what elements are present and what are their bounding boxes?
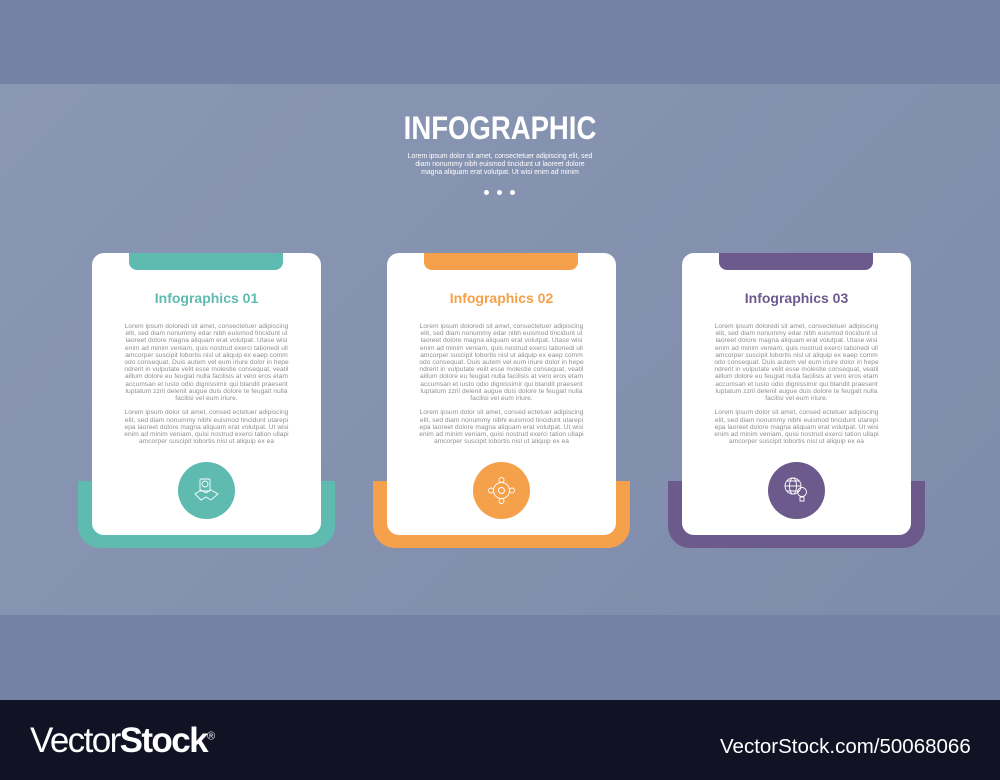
body text: accumsan et iusto odio dignissimir qui blandit praesent bbox=[420, 381, 583, 388]
body text: amcorper suscipit lobortis nisl ut aliquip ex eaep comm bbox=[125, 352, 288, 359]
icon: cycle bbox=[473, 462, 530, 519]
body text: elit, sed diam nonummy nibhi euismod tincidunt utarepi bbox=[420, 417, 583, 424]
body text: aillum dolore eu feugiat nulla facilisis at vero eros etam bbox=[125, 373, 288, 380]
body text: facilisi vel eum iriure. bbox=[765, 395, 828, 402]
body text: epa laoreet dolore magna aliquam erat volutpat. Ut wisi bbox=[714, 424, 879, 431]
body text: Lorem ipsum dolor sit amet, consed ectetuer adipiscing bbox=[715, 409, 878, 416]
tab bbox=[129, 253, 283, 270]
body text: ndrerit in vulputate velit esse molestie consequat, veatil bbox=[124, 366, 289, 373]
body text: accumsan et iusto odio dignissimir qui blandit praesent bbox=[715, 381, 878, 388]
footer bar bbox=[0, 700, 1000, 780]
body text: amcorper suscipit lobortis nisl ut aliquip ex eaep comm bbox=[420, 352, 583, 359]
body text: laoreet dolore magna aliquam erat volutpat. Utase wisi bbox=[126, 337, 287, 344]
title: INFOGRAPHIC bbox=[404, 110, 596, 146]
body text: Lorem ipsum doloredi sit amet, consectetuer adipiscing bbox=[125, 323, 288, 330]
body text: laoreet dolore magna aliquam erat volutpat. Utase wisi bbox=[421, 337, 582, 344]
body text bbox=[419, 323, 584, 445]
body text: ndrerit in vulputate velit esse molestie consequat, veatil bbox=[714, 366, 879, 373]
body text: enim ad minim veniam, quis nostrud exerci tationedi ull bbox=[715, 345, 878, 352]
body text: luptatum zzril delenit augue duis dolore te feugait nulla bbox=[421, 388, 582, 395]
body text: epa laoreet dolore magna aliquam erat volutpat. Ut wisi bbox=[124, 424, 289, 431]
body text: luptatum zzril delenit augue duis dolore te feugait nulla bbox=[126, 388, 287, 395]
subtitle text: magna aliquam erat volutpat. Ut wisi enim ad minim bbox=[421, 169, 579, 176]
panel: card 2 bbox=[387, 253, 616, 535]
body text: Lorem ipsum dolor sit amet, consed ectetuer adipiscing bbox=[420, 409, 583, 416]
body text: enim ad minim veniam, quisi nostrud exerci tation ullapi bbox=[419, 431, 584, 438]
icon: handshake bbox=[178, 462, 235, 519]
body text: aillum dolore eu feugiat nulla facilisis at vero eros etam bbox=[420, 373, 583, 380]
body text: aillum dolore eu feugiat nulla facilisis at vero eros etam bbox=[715, 373, 878, 380]
body text: luptatum zzril delenit augue duis dolore te feugait nulla bbox=[716, 388, 877, 395]
tab bbox=[424, 253, 578, 270]
heading: Infographics 01 bbox=[155, 290, 258, 306]
body text: amcorper suscipit lobortis nisl ut aliquip ex ea bbox=[434, 438, 569, 445]
body text: Lorem ipsum dolor sit amet, consed ectetuer adipiscing bbox=[125, 409, 288, 416]
body text: facilisi vel eum iriure. bbox=[470, 395, 533, 402]
body text: ndrerit in vulputate velit esse molestie consequat, veatil bbox=[419, 366, 584, 373]
body text: Lorem ipsum doloredi sit amet, consectetuer adipiscing bbox=[715, 323, 878, 330]
icon: globe and bulb bbox=[768, 462, 825, 519]
body text: amcorper suscipit lobortis nisl ut aliquip ex eaep comm bbox=[715, 352, 878, 359]
frame: card 3 bbox=[668, 481, 925, 548]
body text: epa laoreet dolore magna aliquam erat volutpat. Ut wisi bbox=[419, 424, 584, 431]
body text: elit, sed diam nonummy nibhi euismod tincidunt utarepi bbox=[715, 417, 878, 424]
body text: enim ad minim veniam, quis nostrud exerci tationedi ull bbox=[125, 345, 288, 352]
panel: card 1 bbox=[92, 253, 321, 535]
dots bbox=[484, 190, 515, 195]
subtitle text: Lorem ipsum dolor sit amet, consectetuer adipiscing elit, sed bbox=[408, 153, 592, 160]
body text: amcorper suscipit lobortis nisl ut aliquip ex ea bbox=[729, 438, 864, 445]
heading: Infographics 03 bbox=[745, 290, 848, 306]
body text: amcorper suscipit lobortis nisl ut aliquip ex ea bbox=[139, 438, 274, 445]
body text: accumsan et iusto odio dignissimir qui blandit praesent bbox=[125, 381, 288, 388]
body text: odo consequat. Duis autem vel eum iriure dolor in hepe bbox=[714, 359, 879, 366]
frame: card 2 bbox=[373, 481, 630, 548]
body text: enim ad minim veniam, quisi nostrud exerci tation ullapi bbox=[714, 431, 879, 438]
subtitle text: diam nonummy nibh euismod tincidunt ut laoreet dolore bbox=[415, 161, 585, 168]
body text: enim ad minim veniam, quisi nostrud exerci tation ullapi bbox=[124, 431, 289, 438]
tab bbox=[719, 253, 873, 270]
background band bbox=[0, 84, 1000, 615]
heading: Infographics 02 bbox=[450, 290, 553, 306]
body text: enim ad minim veniam, quis nostrud exerci tationedi ull bbox=[420, 345, 583, 352]
body text: odo consequat. Duis autem vel eum iriure dolor in hepe bbox=[419, 359, 584, 366]
body text bbox=[714, 323, 879, 445]
panel: card 3 bbox=[682, 253, 911, 535]
url: VectorStock.com/50068066 bbox=[720, 735, 971, 758]
body text: elit, sed diam nonummy edar nibh euismod tincidunt ut bbox=[125, 330, 288, 337]
body text: elit, sed diam nonummy edar nibh euismod tincidunt ut bbox=[420, 330, 583, 337]
body text: elit, sed diam nonummy edar nibh euismod tincidunt ut bbox=[715, 330, 878, 337]
body text: facilisi vel eum iriure. bbox=[175, 395, 238, 402]
body text: laoreet dolore magna aliquam erat volutpat. Utase wisi bbox=[716, 337, 877, 344]
logo: VectorStock® bbox=[30, 721, 213, 760]
body text bbox=[124, 323, 289, 445]
body text: Lorem ipsum doloredi sit amet, consectetuer adipiscing bbox=[420, 323, 583, 330]
frame: card 1 bbox=[78, 481, 335, 548]
subtitle text bbox=[408, 152, 592, 176]
body text: odo consequat. Duis autem vel eum iriure dolor in hepe bbox=[124, 359, 289, 366]
body text: elit, sed diam nonummy nibhi euismod tincidunt utarepi bbox=[125, 417, 288, 424]
